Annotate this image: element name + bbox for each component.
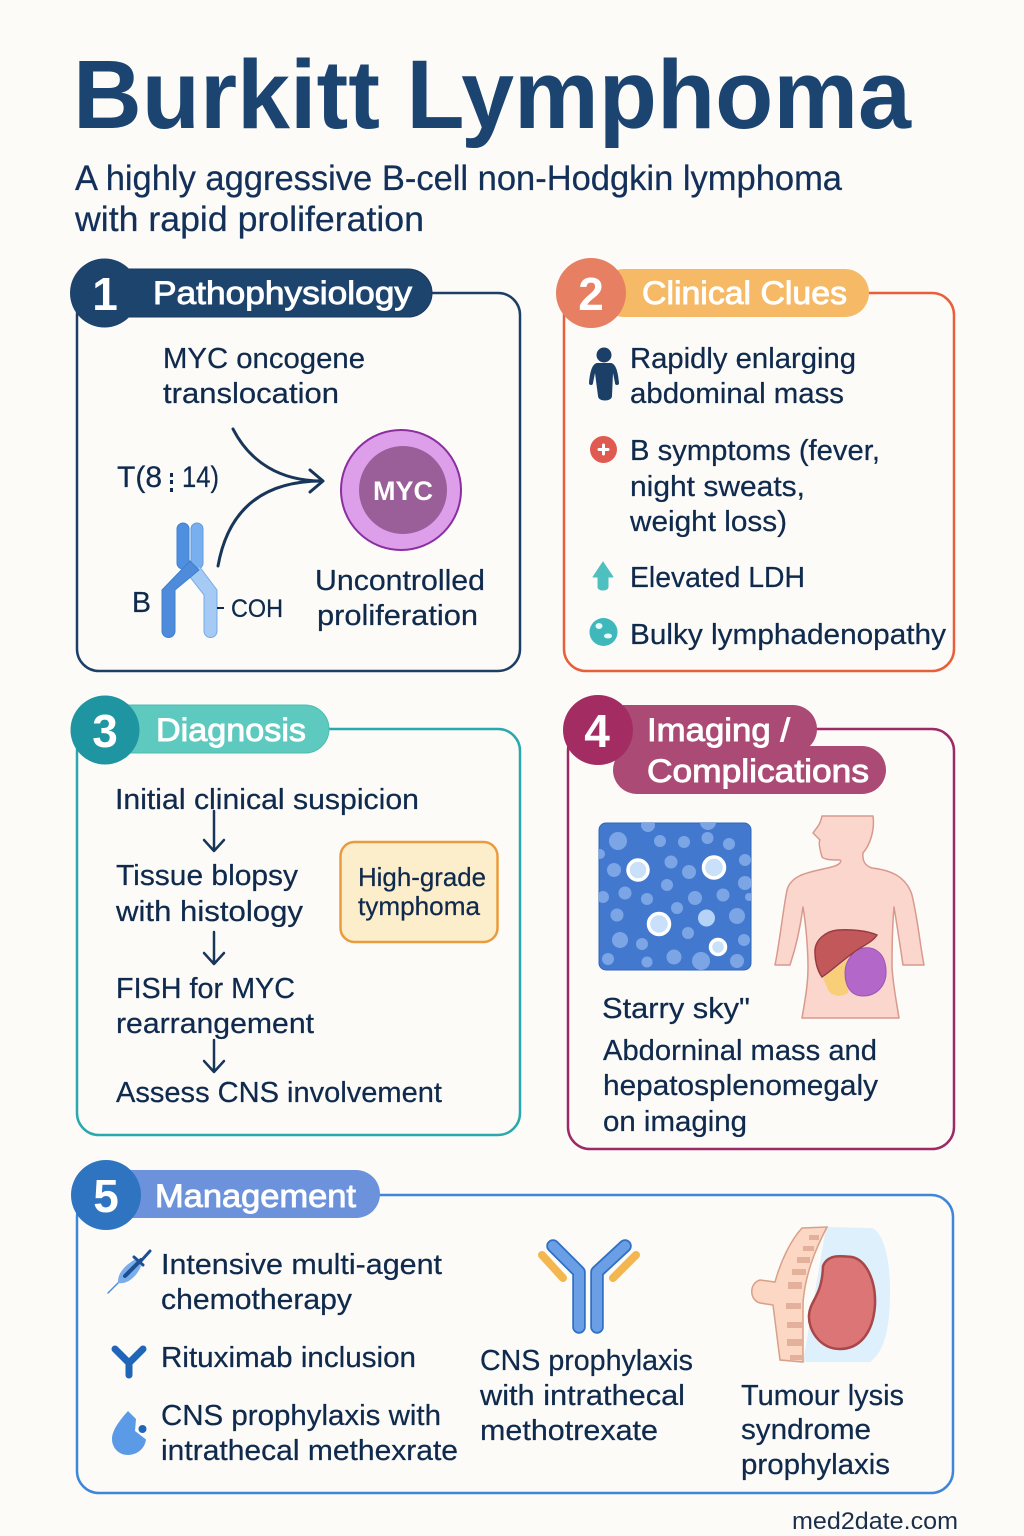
heading: imaging complications bbox=[563, 695, 886, 794]
icon: antibody large bbox=[542, 1246, 636, 1327]
text: starry sky: Starry sky" bbox=[602, 993, 750, 1025]
text: abdominal mass: Rapidly enlarging bbox=[630, 343, 856, 375]
text: CNS prophylaxis methexrate: intrathecal methexrate bbox=[161, 1435, 458, 1467]
text: chemotherapy: Intensive multi-agent bbox=[161, 1249, 442, 1281]
text: lymphadenopathy: Bulky lymphadenopathy bbox=[630, 619, 947, 651]
text: tumour lysis: syndrome bbox=[741, 1414, 871, 1446]
subtitle: A highly aggressive B-cell non-Hodgkin lymphoma bbox=[75, 159, 843, 198]
text: tumour lysis bbox=[741, 1380, 904, 1481]
text: MYC oncogene translocation bbox=[163, 343, 365, 410]
title: Burkitt Lymphoma bbox=[73, 40, 912, 149]
text: B symptoms: B symptoms (fever, bbox=[630, 435, 880, 467]
icon: antibody chromosome bbox=[162, 523, 217, 638]
text: B symptoms: night sweats, bbox=[630, 471, 805, 503]
label: COH: COH bbox=[231, 595, 283, 623]
text: uncontrolled proliferation bbox=[315, 565, 485, 632]
icon: MYC cell bbox=[341, 430, 461, 550]
text: B symptoms: weight loss) bbox=[629, 506, 787, 538]
footer: source: med2date.com bbox=[792, 1508, 958, 1535]
arrow bbox=[204, 932, 224, 964]
text: rituximab: Rituximab inclusion bbox=[161, 1342, 416, 1374]
text: CNS prophylaxis methotrexate: with intrathecal bbox=[479, 1380, 685, 1412]
text: imaging findings bbox=[603, 1035, 878, 1138]
text: imaging findings: on imaging bbox=[603, 1106, 747, 1138]
step: suspicion: Initial clinical suspicion bbox=[115, 784, 419, 816]
icon: MYC cell: MYC bbox=[373, 476, 433, 506]
text: B symptoms bbox=[629, 435, 880, 538]
icon: lymph node bbox=[590, 618, 618, 646]
icon: drop bbox=[112, 1411, 152, 1455]
arrow bbox=[204, 811, 224, 851]
label: B: B bbox=[132, 587, 151, 619]
panel: management bbox=[71, 1160, 953, 1493]
step: FISH bbox=[116, 973, 314, 1040]
text: CNS prophylaxis methexrate: CNS prophylaxis with bbox=[161, 1400, 441, 1432]
text: chemotherapy: chemotherapy bbox=[161, 1284, 353, 1316]
heading: pathophysiology: 1 bbox=[92, 268, 118, 320]
heading: diagnosis: Diagnosis bbox=[156, 712, 306, 748]
heading: management bbox=[71, 1160, 380, 1230]
panel: pathophysiology bbox=[70, 258, 520, 671]
callout: high-grade: tymphoma bbox=[358, 891, 481, 921]
callout: high-grade: High-grade bbox=[358, 862, 486, 892]
icon: syringe bbox=[108, 1251, 150, 1293]
text: imaging findings: hepatosplenomegaly bbox=[603, 1070, 878, 1102]
panel: diagnosis bbox=[70, 696, 520, 1135]
arrow bbox=[204, 1040, 224, 1072]
text: CNS prophylaxis methexrate bbox=[161, 1400, 458, 1467]
text: tumour lysis: Tumour lysis bbox=[741, 1380, 904, 1412]
label: T(8;14): 14) bbox=[182, 461, 219, 494]
panel: clinical clues bbox=[556, 258, 954, 671]
text: uncontrolled proliferation: Uncontrolled bbox=[315, 565, 485, 597]
arrows: converging to MYC bbox=[218, 429, 323, 566]
callout: high-grade bbox=[340, 842, 498, 942]
heading: management: 5 bbox=[93, 1170, 119, 1222]
text: imaging findings: Abdorninal mass and bbox=[603, 1035, 877, 1067]
heading: diagnosis: 3 bbox=[92, 705, 118, 757]
icon: plus badge bbox=[590, 436, 617, 463]
step: FISH: rearrangement bbox=[116, 1008, 314, 1040]
subtitle bbox=[74, 159, 843, 239]
icon: person bbox=[589, 348, 619, 400]
step: CNS: Assess CNS involvement bbox=[116, 1077, 442, 1109]
step: biopsy: Tissue blopsy bbox=[116, 860, 299, 892]
icon: kidney bbox=[752, 1227, 890, 1362]
subtitle: with rapid proliferation bbox=[74, 200, 424, 239]
panel: imaging bbox=[563, 695, 954, 1149]
text: CNS prophylaxis methotrexate: CNS prophylaxis bbox=[480, 1345, 693, 1377]
icon: up arrow bbox=[593, 562, 613, 590]
icon: antibody small bbox=[115, 1349, 143, 1375]
text: elevated LDH: Elevated LDH bbox=[630, 562, 805, 594]
step: biopsy bbox=[115, 860, 304, 928]
heading: imaging complications: 4 bbox=[584, 705, 610, 757]
heading: clinical clues: 2 bbox=[578, 268, 604, 320]
heading: diagnosis bbox=[70, 696, 329, 764]
image: torso with organs bbox=[775, 816, 924, 1018]
step: FISH: FISH for MYC bbox=[116, 973, 295, 1005]
heading: imaging complications: Imaging / bbox=[647, 712, 790, 748]
text: uncontrolled proliferation: proliferation bbox=[317, 600, 478, 632]
image: starry sky histology bbox=[595, 814, 753, 970]
text: abdominal mass: abdominal mass bbox=[630, 378, 844, 410]
heading: management: Management bbox=[155, 1178, 356, 1214]
label: T(8;14): T(8 bbox=[117, 461, 162, 494]
heading: pathophysiology: Pathophysiology bbox=[153, 275, 412, 311]
heading: pathophysiology bbox=[70, 258, 432, 328]
text: MYC oncogene translocation: translocation bbox=[163, 378, 339, 410]
text: chemotherapy bbox=[161, 1249, 442, 1316]
label: T(8;14) bbox=[117, 461, 219, 494]
heading: clinical clues: Clinical Clues bbox=[642, 275, 847, 311]
text: MYC oncogene translocation: MYC oncogene bbox=[163, 343, 365, 375]
step: biopsy: with histology bbox=[115, 896, 304, 928]
text: CNS prophylaxis methotrexate: methotrexate bbox=[480, 1415, 658, 1447]
heading: imaging complications: Complications bbox=[647, 753, 869, 789]
heading: clinical clues bbox=[556, 258, 869, 328]
text: tumour lysis: prophylaxis bbox=[741, 1449, 890, 1481]
text: CNS prophylaxis methotrexate bbox=[479, 1345, 693, 1447]
text: abdominal mass bbox=[630, 343, 856, 410]
